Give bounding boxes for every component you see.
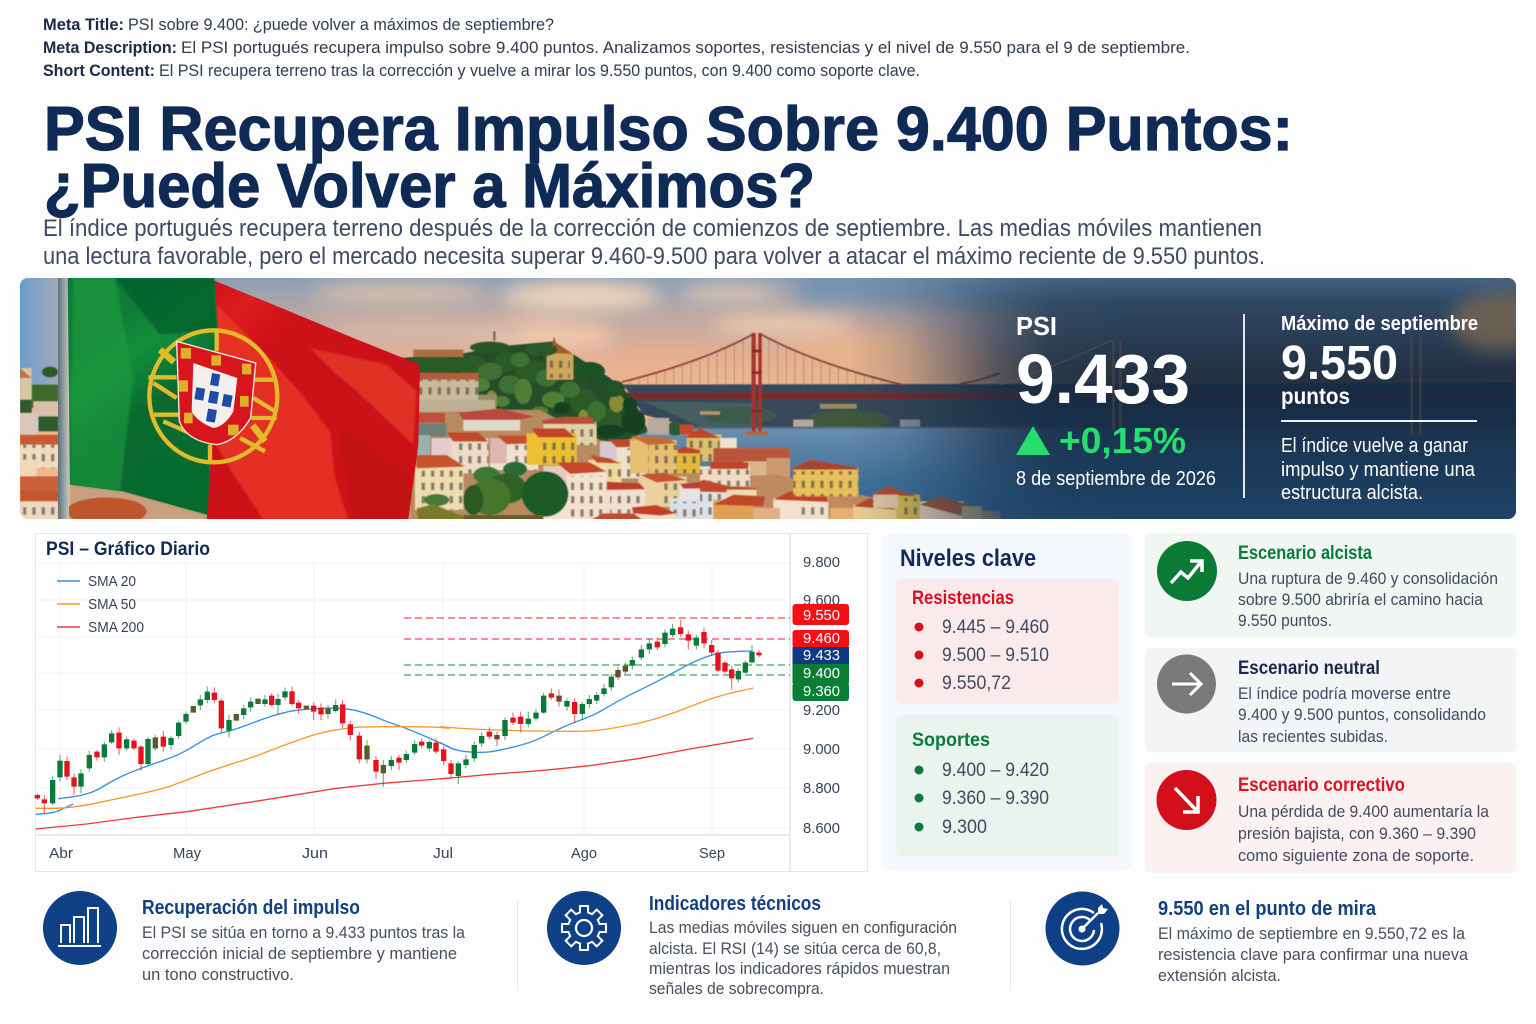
subtitle: El índice portugués recupera terreno después de la corrección de comienzos de septiembre. Las medias móviles mantienen bbox=[43, 215, 1262, 242]
y axis labels: 9.800 bbox=[803, 554, 840, 571]
panel: bullish scenario: 9.550 puntos. bbox=[1238, 611, 1332, 630]
title: PSI Recupera Impulso Sobre 9.400 Puntos: bbox=[44, 95, 1293, 164]
panel: recovery of momentum bbox=[43, 891, 465, 984]
candlesticks bbox=[37, 620, 759, 813]
panel: recovery of momentum: Recuperación del impulso bbox=[142, 897, 360, 919]
panel: corrective scenario: Una pérdida de 9.400 aumentaría la bbox=[1238, 802, 1489, 821]
x axis labels: Jul bbox=[433, 845, 453, 862]
panel: 9.550 in the crosshairs: El máximo de septiembre en 9.550,72 es la bbox=[1158, 924, 1466, 943]
scene left of flag bbox=[20, 367, 210, 525]
panel: technical indicators bbox=[547, 891, 957, 998]
resistances: 9.550,72 bbox=[942, 673, 1011, 694]
stat: máximo de septiembre: 9.550 bbox=[1281, 337, 1398, 390]
icon: trend up bbox=[1157, 541, 1217, 601]
panel: recovery of momentum: corrección inicial de septiembre y mantiene bbox=[142, 944, 457, 963]
icon: target bbox=[1046, 892, 1120, 966]
panel: neutral scenario bbox=[1145, 648, 1516, 752]
title: ¿Puede Volver a Máximos? bbox=[44, 152, 815, 221]
panel: 9.550 in the crosshairs bbox=[1046, 892, 1469, 985]
meta text block: Meta Title: bbox=[43, 15, 124, 34]
meta text block: Meta Description: bbox=[43, 38, 177, 57]
resistances: Resistencias bbox=[912, 588, 1014, 609]
panel: neutral scenario: 9.400 y 9.500 puntos, consolidando bbox=[1238, 705, 1486, 724]
stat: PSI bbox=[1016, 311, 1216, 490]
meta text block: El PSI portugués recupera impulso sobre 9.400 puntos. Analizamos soportes, resistencias y el nivel de 9.550 para el 9 de septiembre. bbox=[181, 38, 1190, 57]
title bbox=[44, 95, 1293, 221]
y axis labels: 9.000 bbox=[803, 741, 840, 758]
icon: gear bbox=[547, 891, 621, 965]
heading: Niveles clave bbox=[900, 545, 1036, 572]
price tags bbox=[792, 604, 849, 701]
x axis labels bbox=[49, 845, 725, 862]
chart legend bbox=[57, 573, 144, 636]
y axis labels bbox=[803, 554, 840, 837]
far buildings bbox=[417, 373, 790, 485]
panel: technical indicators: mientras los indicadores rápidos muestran bbox=[649, 959, 950, 978]
chart title: PSI – Gráfico Diario bbox=[46, 539, 210, 560]
supports: 9.360 – 9.390 bbox=[942, 788, 1049, 809]
price tags: 9.460 bbox=[803, 630, 840, 647]
meta text block: Short Content: bbox=[43, 61, 155, 80]
panel: 9.550 in the crosshairs: 9.550 en el punto de mira bbox=[1158, 898, 1377, 920]
icon: armillary sphere bbox=[148, 330, 277, 462]
panel: neutral scenario: las recientes subidas. bbox=[1238, 727, 1388, 746]
supports: Soportes bbox=[912, 730, 990, 751]
stat: máximo de septiembre: puntos bbox=[1281, 383, 1350, 409]
supports: 9.400 – 9.420 bbox=[942, 760, 1049, 781]
panel: bullish scenario: Escenario alcista bbox=[1238, 543, 1372, 564]
dark overlay bbox=[850, 278, 1516, 519]
x axis labels: Ago bbox=[571, 845, 597, 862]
chart legend: SMA 200 bbox=[88, 619, 144, 636]
x axis labels: Abr bbox=[49, 845, 73, 862]
flag of Portugal bbox=[68, 278, 420, 520]
panel: technical indicators: Indicadores técnicos bbox=[649, 893, 821, 915]
price tags: 9.550 bbox=[803, 607, 840, 624]
meta text block: PSI sobre 9.400: ¿puede volver a máximos de septiembre? bbox=[128, 15, 554, 34]
icon: bar chart bbox=[43, 891, 117, 965]
resistances: 9.445 – 9.460 bbox=[942, 617, 1049, 638]
panel: recovery of momentum: un tono constructivo. bbox=[142, 965, 294, 984]
x axis labels: May bbox=[173, 845, 201, 862]
stat: máximo de septiembre: impulso y mantiene una bbox=[1281, 459, 1476, 481]
panel: recovery of momentum: El PSI se sitúa en torno a 9.433 puntos tras la bbox=[142, 923, 465, 942]
stat: PSI: 8 de septiembre de 2026 bbox=[1016, 468, 1216, 490]
chart legend: SMA 20 bbox=[88, 573, 136, 590]
icon: up triangle bbox=[1016, 426, 1050, 455]
icon: arrow down right bbox=[1156, 770, 1216, 830]
hill with trees bbox=[400, 331, 684, 451]
y axis labels: 8.600 bbox=[803, 820, 840, 837]
stat: máximo de septiembre bbox=[1281, 313, 1478, 504]
meta text block: El PSI recupera terreno tras la corrección y vuelve a mirar los 9.550 puntos, con 9.400 como soporte clave. bbox=[159, 61, 920, 80]
panel: bullish scenario bbox=[1145, 533, 1516, 637]
panel: neutral scenario: Escenario neutral bbox=[1238, 658, 1380, 679]
panel: bullish scenario: sobre 9.500 abriría el camino hacia bbox=[1238, 590, 1483, 609]
foreground town below hill bbox=[410, 400, 700, 522]
icon: shield bbox=[177, 341, 256, 445]
icon: flagpole bbox=[58, 278, 69, 519]
moving averages bbox=[36, 651, 753, 829]
meta text block bbox=[43, 15, 1190, 80]
stat: máximo de septiembre: El índice vuelve a ganar bbox=[1281, 435, 1468, 457]
level dashed lines bbox=[404, 618, 790, 675]
scene behind right of flag bbox=[400, 331, 1536, 525]
panel: neutral scenario: El índice podría moverse entre bbox=[1238, 684, 1451, 703]
stat: máximo de septiembre: Máximo de septiembre bbox=[1281, 313, 1478, 335]
panel: corrective scenario: presión bajista, con 9.360 – 9.390 bbox=[1238, 824, 1476, 843]
panel: 9.550 in the crosshairs: resistencia clave para confirmar una nueva bbox=[1158, 945, 1469, 964]
price tags: 9.400 bbox=[803, 665, 840, 682]
panel: hero banner bbox=[20, 270, 1536, 525]
y axis labels: 8.800 bbox=[803, 780, 840, 797]
resistances: 9.500 – 9.510 bbox=[942, 645, 1049, 666]
supports bbox=[896, 715, 1119, 856]
panel: technical indicators: señales de sobrecompra. bbox=[649, 979, 824, 998]
stat: PSI: PSI bbox=[1016, 311, 1057, 341]
panel: key levels bbox=[882, 533, 1132, 871]
icon: arrow right bbox=[1157, 654, 1216, 714]
price tags: 9.360 bbox=[803, 683, 840, 700]
panel: corrective scenario bbox=[1145, 763, 1516, 873]
stat: máximo de septiembre: estructura alcista. bbox=[1281, 482, 1423, 504]
panel: daily chart bbox=[36, 534, 868, 872]
subtitle bbox=[43, 215, 1265, 270]
panel: technical indicators: Las medias móviles siguen en configuración bbox=[649, 918, 957, 937]
supports: 9.300 bbox=[942, 817, 987, 838]
x axis labels: Jun bbox=[302, 845, 328, 862]
panel: corrective scenario: como siguiente zona de soporte. bbox=[1238, 846, 1474, 865]
y axis labels: 9.600 bbox=[803, 592, 840, 609]
subtitle: una lectura favorable, pero el mercado necesita superar 9.460-9.500 para volver a atacar el máximo reciente de 9.550 puntos. bbox=[43, 243, 1265, 270]
y axis labels: 9.200 bbox=[803, 702, 840, 719]
chart legend: SMA 50 bbox=[88, 596, 136, 613]
panel: technical indicators: alcista. El RSI (14) se sitúa cerca de 60,8, bbox=[649, 939, 941, 958]
x axis labels: Sep bbox=[699, 845, 725, 862]
stat: PSI: 9.433 bbox=[1016, 340, 1190, 418]
stat: PSI: +0,15% bbox=[1059, 420, 1186, 461]
panel: corrective scenario: Escenario correctivo bbox=[1238, 775, 1405, 796]
price tags: 9.433 bbox=[803, 647, 840, 664]
panel: 9.550 in the crosshairs: extensión alcista. bbox=[1158, 966, 1281, 985]
panel: bullish scenario: Una ruptura de 9.460 y consolidación bbox=[1238, 569, 1498, 588]
resistances bbox=[896, 579, 1119, 704]
